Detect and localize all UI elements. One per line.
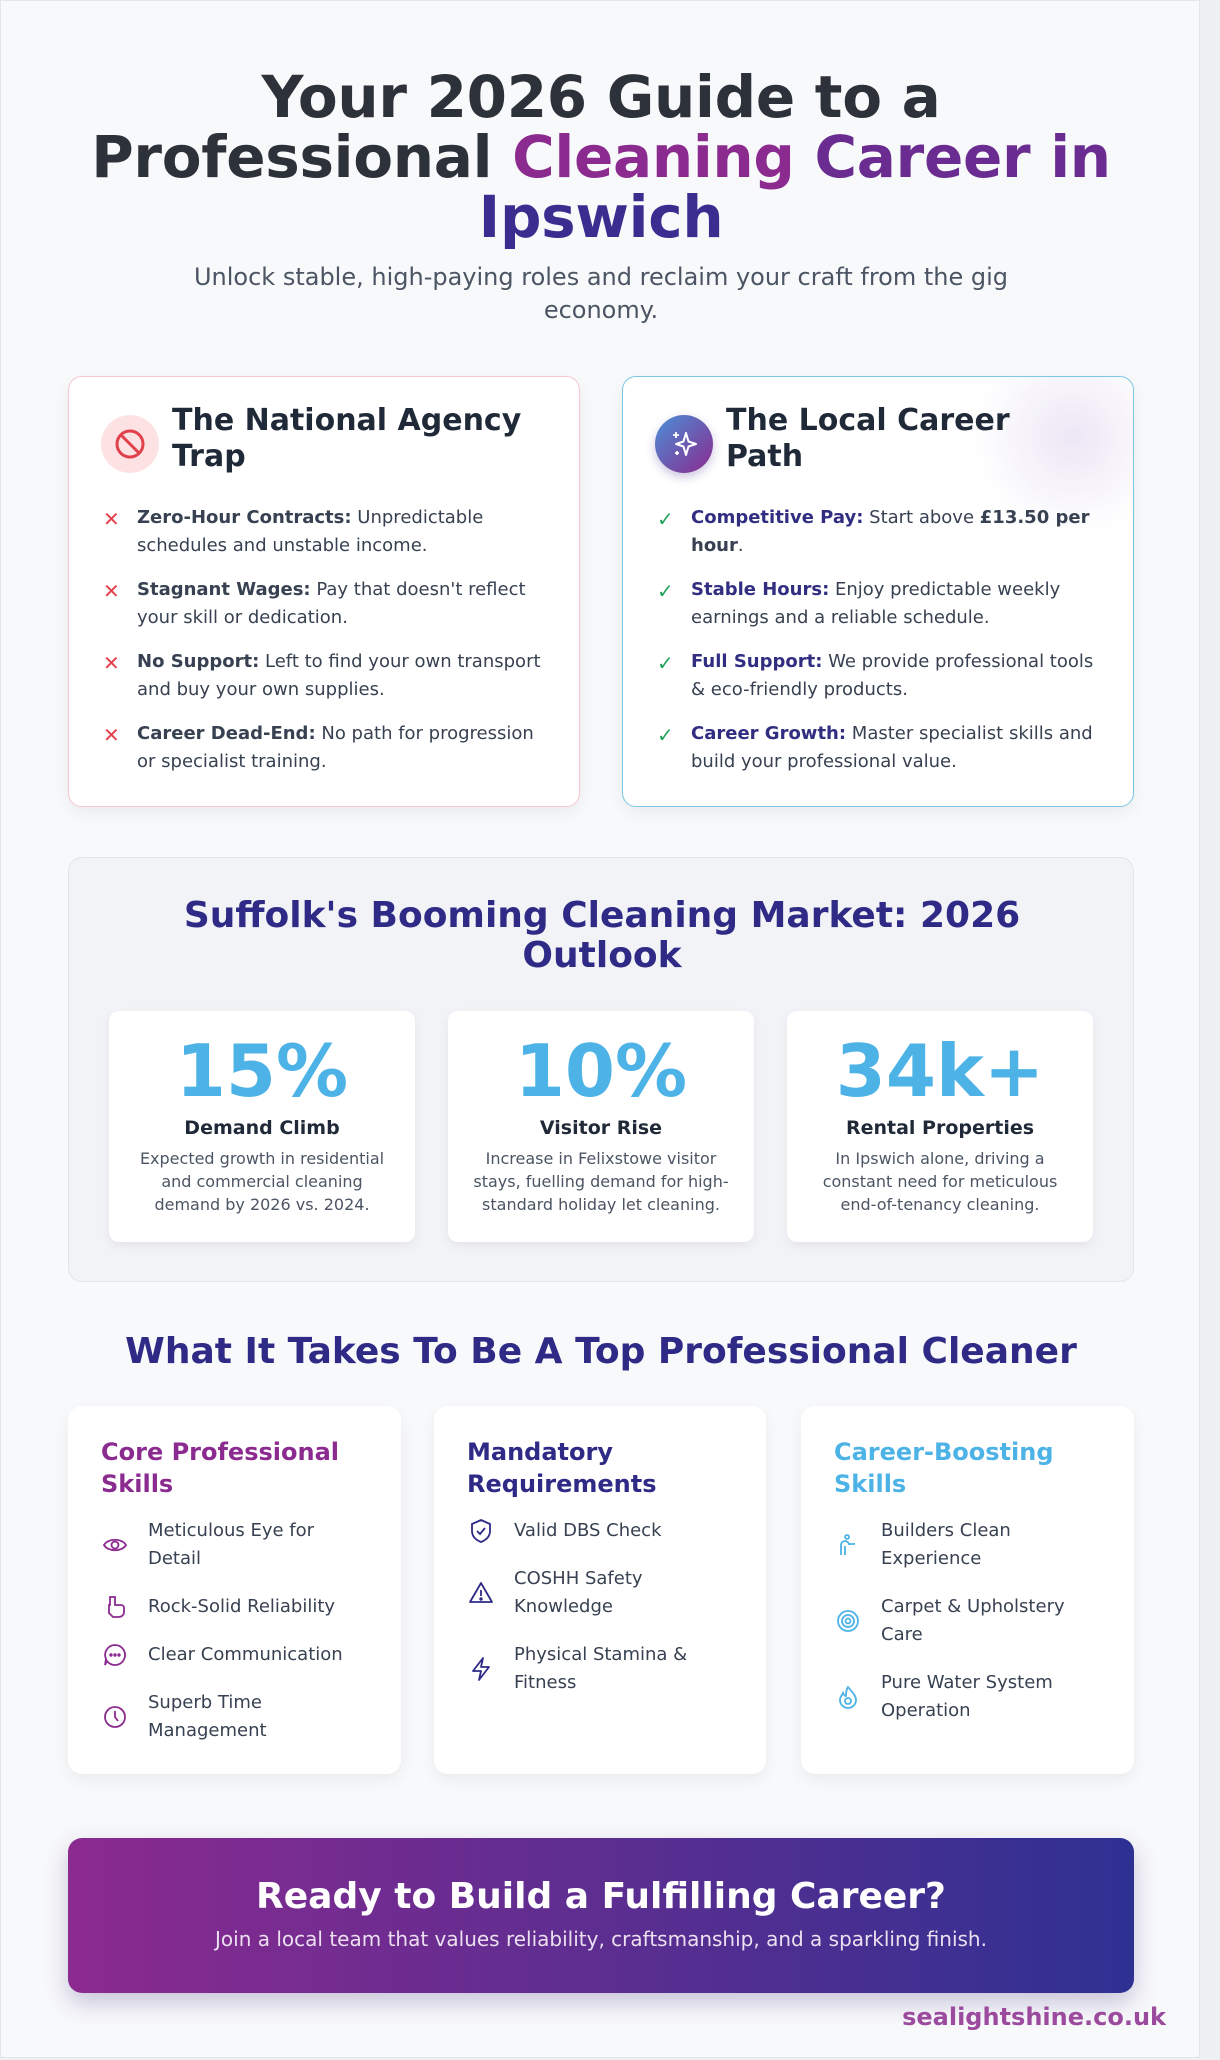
stat: rentals: Rental Properties xyxy=(846,1117,1034,1139)
list: core skills: Superb Time Management xyxy=(148,1692,267,1741)
list: agency problems: ✕ xyxy=(103,723,120,747)
stat: visitors: stays, fuelling demand for high- xyxy=(473,1172,729,1191)
list: core skills: Meticulous Eye for Detail xyxy=(148,1520,314,1569)
stat: rentals: end-of-tenancy cleaning. xyxy=(841,1195,1039,1214)
title: Ipswich xyxy=(479,183,723,251)
heading: core xyxy=(101,1438,339,1498)
list: local benefits: Full Support: We provide professional tools xyxy=(691,651,1093,672)
list: core skills: Rock-Solid Reliability xyxy=(148,1596,335,1617)
stat: demand: demand by 2026 vs. 2024. xyxy=(154,1195,370,1214)
heading: market: Suffolk's Booming Cleaning Market: 2026 xyxy=(184,895,1020,936)
list: agency problems xyxy=(103,507,541,772)
stat: demand: 15% xyxy=(176,1029,348,1113)
footer: website: sealightshine.co.uk xyxy=(902,2003,1166,2031)
list: career skills xyxy=(837,1520,1065,1721)
list: local benefits: & eco-friendly products. xyxy=(691,679,908,700)
heading: mandatory: Requirements xyxy=(467,1470,656,1498)
list: local benefits: Career Growth: Master specialist skills and xyxy=(691,723,1093,744)
heading: career boosting: Career-Boosting xyxy=(834,1438,1054,1466)
stat: visitors: standard holiday let cleaning. xyxy=(482,1195,720,1214)
list: agency problems: ✕ xyxy=(103,651,120,675)
list: agency problems: Career Dead-End: No path for progression xyxy=(137,723,534,744)
stat: visitors xyxy=(448,1011,754,1242)
heading: agency: Trap xyxy=(172,439,246,474)
callout: CTA banner xyxy=(68,1838,1134,1993)
panel: core skills xyxy=(68,1406,401,1774)
stat: rentals: 34k+ xyxy=(836,1029,1044,1113)
heading: mandatory: Mandatory xyxy=(467,1438,613,1466)
title: Your 2026 Guide to a xyxy=(262,63,940,131)
list: local benefits: hour. xyxy=(691,535,744,556)
stat: rentals xyxy=(787,1011,1093,1242)
stat: visitors: Increase in Felixstowe visitor xyxy=(486,1149,716,1168)
list: local benefits: ✓ xyxy=(657,723,674,747)
list: local benefits: build your professional value. xyxy=(691,751,957,772)
panel: market outlook xyxy=(68,857,1134,1282)
panel: mandatory requirements xyxy=(434,1406,766,1774)
heading: market xyxy=(184,895,1020,976)
subtitle xyxy=(194,263,1008,324)
list: agency problems: Zero-Hour Contracts: Unpredictable xyxy=(137,507,483,528)
list: local benefits: ✓ xyxy=(657,507,674,531)
heading: core: Skills xyxy=(101,1470,173,1498)
stat: rentals: In Ipswich alone, driving a xyxy=(835,1149,1045,1168)
list: career skills: Carpet & Upholstery Care xyxy=(881,1596,1065,1645)
heading: career boosting: Skills xyxy=(834,1470,906,1498)
list: agency problems: ✕ xyxy=(103,579,120,603)
stat: demand: Demand Climb xyxy=(184,1117,340,1139)
CTA text: Join a local team that values reliability, craftsmanship, and a sparkling finish. xyxy=(215,1927,987,1951)
stat: demand: and commercial cleaning xyxy=(161,1172,363,1191)
stat: rentals: constant need for meticulous xyxy=(823,1172,1057,1191)
list: agency problems: No Support: Left to find your own transport xyxy=(137,651,541,672)
list: requirements: COSHH Safety Knowledge xyxy=(514,1568,643,1617)
list: requirements xyxy=(469,1519,687,1693)
heading: agency xyxy=(172,403,521,474)
CTA heading: Ready to Build a Fulfilling Career? xyxy=(256,1876,946,1917)
list: agency problems: schedules and unstable income. xyxy=(137,535,428,556)
list: core skills xyxy=(103,1520,343,1741)
stat: demand: Expected growth in residential xyxy=(140,1149,384,1168)
list: agency problems: ✕ xyxy=(103,507,120,531)
list: local benefits: ✓ xyxy=(657,651,674,675)
heading: core: Core Professional xyxy=(101,1438,339,1466)
heading: what it takes: What It Takes To Be A Top Professional Cleaner xyxy=(125,1331,1077,1372)
list: agency problems: and buy your own supplies. xyxy=(137,679,385,700)
list: local benefits: ✓ xyxy=(657,579,674,603)
list: local benefits: earnings and a reliable schedule. xyxy=(691,607,990,628)
list: requirements: Physical Stamina & Fitness xyxy=(514,1644,687,1693)
list: local benefits: Stable Hours: Enjoy predictable weekly xyxy=(691,579,1060,600)
list: local benefits: Competitive Pay: Start above £13.50 per xyxy=(691,507,1089,528)
heading: agency: The National Agency xyxy=(172,403,521,438)
stat: demand xyxy=(109,1011,415,1242)
list: agency problems: your skill or dedication. xyxy=(137,607,348,628)
stat: visitors: Visitor Rise xyxy=(540,1117,662,1139)
icon: sparkle xyxy=(655,415,713,473)
panel: local career path xyxy=(622,376,1134,807)
list: agency problems: Stagnant Wages: Pay that doesn't reflect xyxy=(137,579,526,600)
list: local benefits xyxy=(657,507,1093,772)
list: requirements: Valid DBS Check xyxy=(514,1520,662,1541)
heading: local: The Local Career xyxy=(726,403,1010,438)
title: Professional Cleaning Career in xyxy=(91,123,1111,191)
list: career skills: Pure Water System Operation xyxy=(881,1672,1053,1721)
title xyxy=(91,63,1111,251)
heading: career boosting xyxy=(834,1438,1054,1498)
icon: prohibition xyxy=(101,415,159,473)
subtitle: Unlock stable, high-paying roles and reclaim your craft from the gig xyxy=(194,263,1008,291)
heading: local: Path xyxy=(726,439,803,474)
list: agency problems: or specialist training. xyxy=(137,751,327,772)
heading: market: Outlook xyxy=(522,935,682,976)
list: core skills: Clear Communication xyxy=(148,1644,343,1665)
heading: local xyxy=(726,403,1010,474)
panel: career-boosting skills xyxy=(801,1406,1134,1774)
subtitle: economy. xyxy=(544,296,658,324)
panel: national agency trap xyxy=(68,376,580,807)
stat: visitors: 10% xyxy=(515,1029,687,1113)
heading: mandatory xyxy=(467,1438,656,1498)
list: career skills: Builders Clean Experience xyxy=(881,1520,1011,1569)
